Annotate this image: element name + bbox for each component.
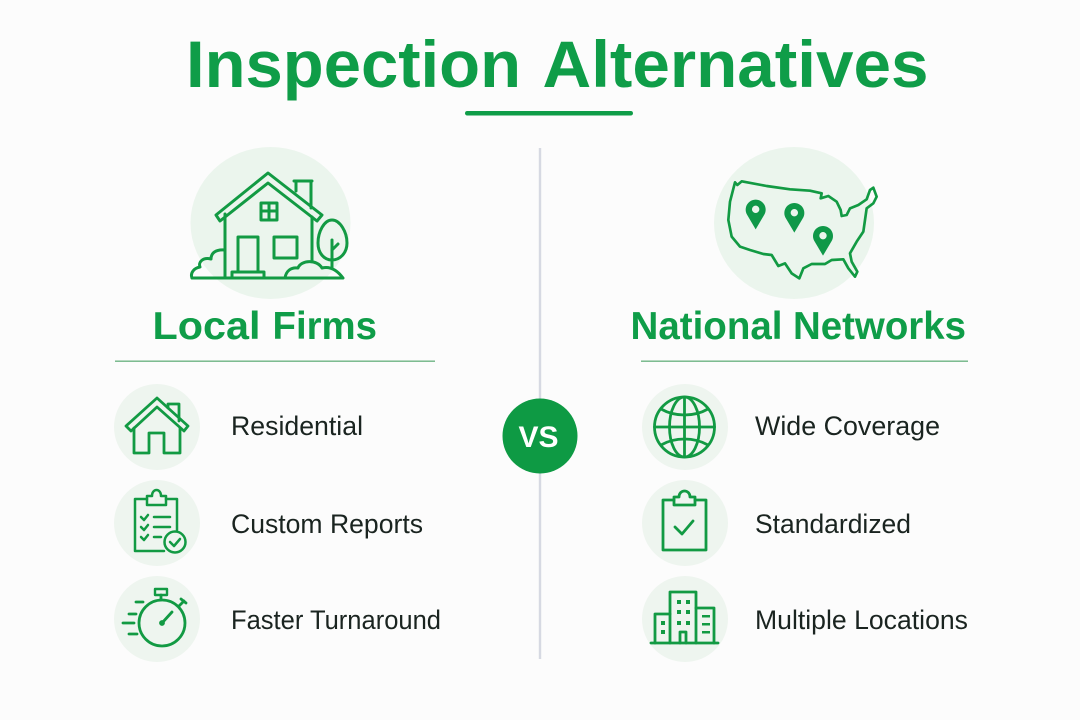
title underline [465, 111, 633, 116]
heading: local firms: Local [152, 305, 260, 348]
label: custom reports: Custom Reports [231, 509, 423, 539]
heading rule [115, 360, 435, 362]
heading: national networks: National [630, 305, 782, 348]
heading: national networks: Networks [793, 305, 966, 348]
label: wide coverage: Wide Coverage [755, 411, 940, 441]
icon: us map with pins [714, 147, 877, 299]
vs badge: VS [518, 421, 559, 454]
panel: local firms [114, 147, 441, 662]
icon: house illustration [190, 147, 350, 299]
title [186, 27, 928, 101]
label: faster turnaround: Faster Turnaround [231, 605, 441, 635]
title: Inspection [186, 27, 521, 101]
heading rule [641, 360, 968, 362]
item: custom reports [114, 480, 200, 566]
item: wide coverage [642, 384, 728, 470]
label: multiple locations: Multiple Locations [755, 605, 968, 635]
item: standardized [642, 480, 728, 566]
panel: national networks [630, 147, 968, 662]
item: multiple locations [642, 576, 728, 662]
label: residential: Residential [231, 411, 363, 441]
heading: local firms [152, 305, 377, 348]
item: residential [114, 384, 200, 470]
pin 3 [813, 226, 833, 256]
label: standardized: Standardized [755, 509, 911, 539]
heading: national networks [630, 305, 966, 348]
pin 2 [784, 203, 804, 233]
heading: local firms: Firms [272, 305, 377, 348]
pin 1 [746, 200, 766, 229]
vs badge [502, 398, 578, 474]
center divider [539, 148, 541, 659]
item: faster turnaround [114, 576, 200, 662]
title: Alternatives [542, 27, 928, 101]
